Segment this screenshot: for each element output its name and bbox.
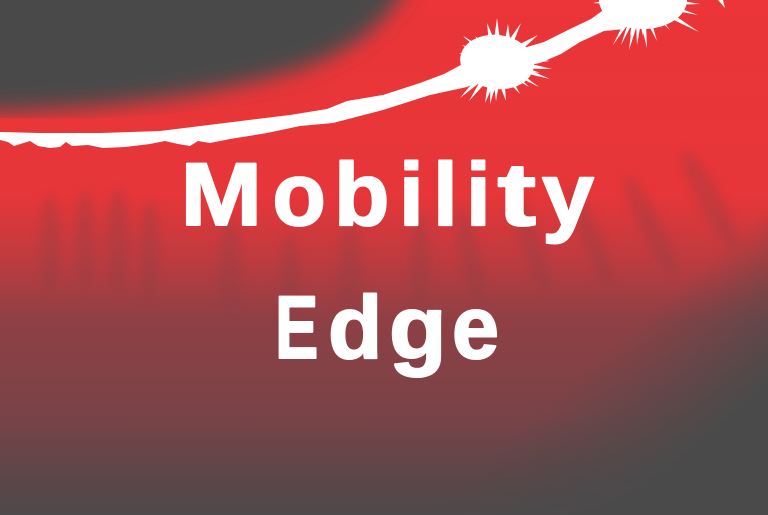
title: Edge: d — [328, 277, 382, 377]
title: Mobility: i — [399, 144, 424, 244]
title: Mobility: y — [542, 145, 594, 245]
small spike — [718, 0, 725, 8]
title: Edge: g — [389, 278, 447, 377]
spark burst 1 — [457, 18, 552, 104]
title: Mobility — [180, 144, 594, 245]
title: Mobility: b — [334, 146, 389, 245]
dark upper-left area — [0, 0, 420, 112]
title: Mobility: i — [466, 144, 491, 244]
lightning rope — [0, 0, 725, 148]
streak texture — [40, 146, 746, 325]
rope strand — [0, 10, 625, 148]
title: Mobility: l — [433, 144, 458, 244]
title: Edge: E — [275, 277, 318, 377]
title: Mobility: o — [272, 144, 326, 244]
grey lower-right shading — [0, 200, 768, 515]
title: Edge: e — [452, 278, 499, 377]
title: Mobility: t — [498, 145, 536, 244]
title: Mobility: M — [180, 144, 262, 244]
spark burst 2 — [593, 0, 700, 50]
title: Edge — [275, 277, 499, 377]
